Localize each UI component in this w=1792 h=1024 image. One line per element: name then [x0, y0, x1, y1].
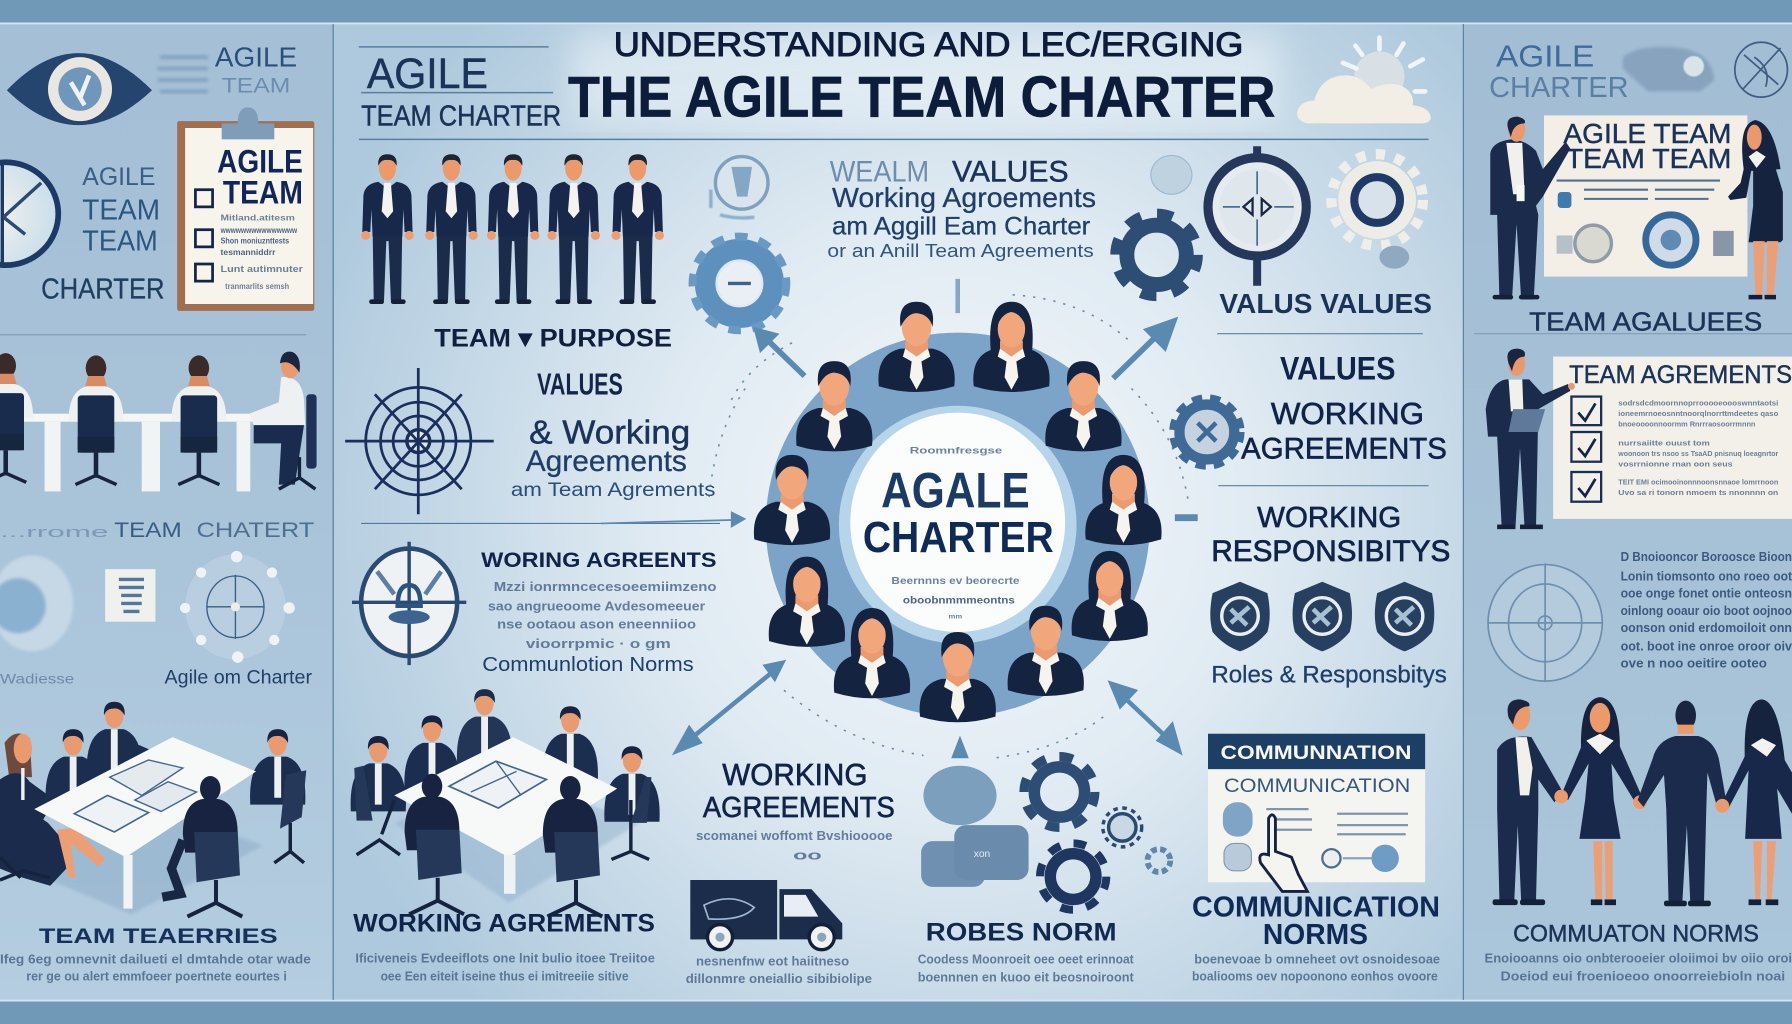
central hub: oboobnmmmeontns — [903, 595, 1015, 606]
team agreements board — [1553, 357, 1792, 519]
caption under robes norm: boennnen en kuoo eit beosnoiroont — [918, 971, 1135, 985]
caption — [1192, 952, 1440, 984]
caption under truck: nesnenfnw eot haiitneso — [696, 955, 849, 969]
text: values and agreements top: WEALM — [830, 156, 929, 189]
heading: agile team team charter: TEAM — [82, 194, 160, 226]
icon: target big — [1208, 146, 1306, 286]
title glow — [571, 34, 1280, 123]
heading: team agaluees: TEAM AGALUEES — [1529, 306, 1762, 336]
caption under truck — [686, 955, 872, 986]
presenter man — [1490, 117, 1570, 299]
icons: bottom right gears and chat: xon — [974, 849, 991, 860]
central hub: AGALE — [881, 461, 1030, 518]
text: values and agreements top: am Aggill Eam Charter — [832, 212, 1090, 240]
heading: agile team team charter: TEAM — [82, 225, 158, 257]
text: values working agreements — [1241, 350, 1447, 465]
central hub: Roomnfresgse — [910, 446, 1002, 456]
clipboard: Shon moniuznttests — [221, 236, 290, 245]
heading: agile charter: AGILE — [1496, 38, 1594, 73]
arrow: to values top right — [1113, 317, 1178, 378]
label: agile charter: Agile om Charter — [165, 666, 313, 688]
icons: pale shield and blue gear — [693, 157, 786, 330]
caption: Enoiooanns oio onbterooeier oloiimoi bv oiio oroi — [1485, 951, 1792, 965]
heading: agile team team charter: AGILE — [82, 163, 155, 191]
text: working agreements block: Communlotion Norms — [482, 653, 694, 676]
title: THE AGILE TEAM CHARTER — [568, 66, 1275, 130]
icon: radar circle — [1488, 563, 1602, 681]
heading: team purpose: TEAM ▾ PURPOSE — [434, 324, 672, 352]
heading: team charter strip: ...rrome — [0, 525, 109, 541]
title — [568, 26, 1275, 130]
icon: light gear — [1280, 154, 1423, 269]
central hub: CHARTER — [863, 514, 1054, 562]
caption: boaliooms oev nopoonono eonhos ovoore — [1192, 970, 1438, 984]
text block garbled: ooe onge fonet ontie onteosn — [1621, 587, 1792, 601]
icons: faded car and drawn circle — [1623, 42, 1787, 97]
card: communication: COMMUNICATION — [1224, 775, 1410, 797]
heading: agile team small — [158, 41, 297, 98]
caption garbled — [0, 952, 311, 984]
team agreements board: vosrrnionne rnan oon seus — [1618, 459, 1733, 468]
label: agile charter — [0, 666, 313, 688]
heading: communication norms — [1192, 892, 1440, 951]
text: values working agreements: WORKING — [1271, 396, 1424, 431]
team agreements board: woonoon trs nsoo ss TsaAD pnisnuq loeagnrtor — [1617, 449, 1778, 458]
text: values working agreements: AGREEMENTS — [1241, 432, 1447, 465]
heading: agile team team charter: CHARTER — [41, 273, 165, 305]
panel: central column — [334, 24, 1463, 1000]
meeting: isometric team table — [0, 702, 306, 917]
caption garbled: Ifeg 6eg omnevnit dailueti el dmtahde otar wade — [0, 952, 311, 966]
text: working agreements center lower: AGREEMENTS — [703, 792, 895, 824]
text: values and working agreements left: Agreements — [526, 445, 687, 478]
title: UNDERSTANDING AND LEC/ERGING — [614, 26, 1243, 64]
text: working agreements center lower — [696, 757, 895, 862]
text: working responsibilities — [1211, 502, 1450, 568]
caption under robes norm: Coodess Moonroeit oee oeet erinnoat — [918, 952, 1134, 966]
team agreements board: nurrsaiitte ouust tom — [1618, 439, 1710, 448]
heading: agile charter: CHARTER — [1489, 72, 1629, 104]
text block garbled: oot. boot ine onroe oroor oiv — [1621, 639, 1792, 653]
text: values working agreements: VALUES — [1280, 350, 1395, 386]
icon: clock — [0, 162, 58, 265]
panel: right column — [1464, 24, 1792, 1000]
heading: agile team small: TEAM — [222, 73, 290, 98]
text block garbled: ove n noo oeitire ooteo — [1621, 656, 1767, 670]
caption: Doeiod eui froenioeoo onoorreiebioln noai — [1501, 970, 1785, 984]
icons: bottom right gears and chat — [921, 757, 1170, 910]
heading: communication norms: NORMS — [1263, 919, 1368, 951]
icon: hand cursor — [1260, 815, 1307, 891]
text: working agreements block: vioorrpmic · o gm — [526, 637, 671, 651]
text: working agreements block: sao angrueoome Avdesomeeuer — [488, 599, 705, 613]
text block garbled: oonson onid erdomoiloit onn — [1621, 621, 1792, 635]
text: working responsibilities: WORKING — [1257, 502, 1401, 534]
text: values and working agreements left: & Working — [529, 414, 690, 451]
icons: three role badges — [1210, 582, 1434, 651]
heading: communication norms: COMMUNICATION — [1192, 892, 1440, 924]
icon: blue gear right — [1173, 398, 1241, 466]
clipboard: AGILE — [217, 144, 303, 180]
clipboard: tesmanniddrr — [221, 248, 275, 257]
icon: delivery truck — [690, 880, 842, 950]
caption garbled: oee Een eiteit iseine thus ei imitreeiie sitive — [381, 970, 629, 984]
caption garbled — [355, 951, 655, 984]
heading: agile team team charter — [41, 163, 165, 305]
meeting: seated row at table — [0, 352, 317, 491]
heading: robes norm: ROBES NORM — [926, 919, 1117, 947]
text: working agreements block: Mzzi ionrmncecesoeemiimzeno — [494, 580, 717, 594]
dashed orbit — [709, 295, 1189, 758]
central hub: mm — [949, 613, 962, 620]
caption — [1485, 951, 1792, 984]
heading: agile team charter badge — [359, 47, 1429, 139]
presentation board: AGILE TEAM — [1563, 118, 1731, 149]
heading: agile charter — [1489, 38, 1629, 104]
four team members holding hands — [1493, 697, 1792, 906]
panel: left column — [0, 24, 333, 1000]
text: working agreements block: nse ootaou ason eneenniioo — [497, 618, 696, 632]
team agreements board: bnoeoooonnoormm Rnrrraosoorrmnnn — [1618, 419, 1756, 428]
text: roles and responsibilities: Roles & Responsbitys — [1211, 661, 1447, 688]
card: communication: COMMUNNATION — [1221, 742, 1411, 764]
arrow faint up — [956, 279, 960, 313]
heading: commuaton norms: COMMUATON NORMS — [1513, 921, 1759, 948]
text block garbled — [1621, 550, 1792, 670]
heading: agile team small: AGILE — [215, 41, 297, 72]
caption garbled: Ificiveneis Evdeeiflots one lnit bulio itoee Treiitoe — [355, 951, 655, 965]
heading: team teaerries: TEAM TEAERRIES — [39, 923, 278, 948]
clipboard: wwwwwwwwwwwwwww — [220, 226, 298, 235]
clipboard: tranmarlits semsh — [225, 282, 289, 291]
presenter with tablet — [1486, 349, 1575, 529]
icons: blurred lens, document, network — [0, 551, 295, 663]
central hub: Beernnns ev beorecrte — [891, 576, 1020, 587]
arrow: to values top left — [753, 327, 805, 376]
text: working responsibilities: RESPONSIBITYS — [1211, 535, 1450, 568]
text: working agreements center lower: WORKING — [722, 757, 867, 792]
icon: lock target — [352, 542, 466, 665]
text: values and agreements top: or an Anill Team Agreements — [827, 240, 1094, 261]
text: values and working agreements left — [511, 366, 715, 501]
caption under robes norm — [918, 952, 1135, 985]
text: values and working agreements left: VALUES — [537, 366, 623, 401]
arrows: lower flows — [601, 512, 1198, 758]
caption under truck: dillonmre oneiallio sibibiolipe — [686, 972, 872, 986]
card: communication — [1208, 734, 1425, 882]
heading: agile team charter badge: TEAM CHARTER — [361, 101, 561, 133]
heading: working agrements: WORKING AGREMENTS — [353, 909, 655, 937]
heading: team charter strip: TEAM — [114, 517, 182, 542]
heading: team charter strip — [0, 517, 314, 542]
team agreements board: sodrsdcdmoornnoprrooooeoooswnntaotsi — [1618, 399, 1778, 408]
team agreements board: TEIT EMI ocimooinonnnoonsnnaoe lomrrnoon — [1618, 478, 1779, 487]
team agreements board: Uvo sa ri tonorn nmoem ts nnonnnn on — [1618, 488, 1779, 497]
icon: target crosshair — [345, 368, 494, 514]
text: working agreements center lower: oo — [793, 848, 822, 862]
heading: team charter strip: CHATERT — [197, 517, 314, 542]
meeting: second isometric table — [351, 689, 660, 917]
text: working agreements block — [481, 547, 717, 676]
clipboard — [177, 107, 314, 311]
clipboard: Mitland.atitesm — [221, 214, 295, 223]
team agreements board: ioneemrnoeosnntnoorqlnorrttmdeetes qaso — [1618, 409, 1779, 418]
icons: pale capsule and dark gear top right — [1115, 155, 1198, 296]
text: values and working agreements left: am Team Agrements — [511, 479, 715, 501]
heading: agile team charter badge: AGILE — [367, 50, 488, 97]
icon: eye — [7, 53, 152, 125]
presenter woman — [1728, 120, 1783, 299]
text: values and agreements top — [827, 156, 1096, 261]
caption garbled: rer ge ou alert emmfoeer poertnete eourtes i — [26, 970, 287, 984]
row of five team members — [361, 154, 664, 304]
text: working agreements block: WORING AGREENTS — [481, 547, 717, 572]
icon: sun and cloud — [1297, 38, 1431, 123]
label: agile charter: Wadiesse — [0, 671, 75, 686]
presentation board — [1544, 115, 1747, 277]
faded lines — [1223, 710, 1429, 712]
caption: boenevoae b omneheet ovt osnoidesoae — [1194, 952, 1440, 966]
central hub — [850, 413, 1065, 632]
text: values values: VALUS VALUES — [1219, 288, 1432, 319]
ring of team members — [754, 302, 1162, 722]
text: values and agreements top: Working Agroements — [832, 182, 1096, 213]
clipboard: Lunt autimnuter — [221, 264, 303, 274]
text: working agreements center lower: scomanei woffomt Bvshiooooe — [696, 829, 893, 843]
presentation board: TEAM TEAM — [1566, 143, 1731, 174]
text: values and agreements top: VALUES — [952, 156, 1069, 189]
clipboard: TEAM — [223, 174, 303, 210]
